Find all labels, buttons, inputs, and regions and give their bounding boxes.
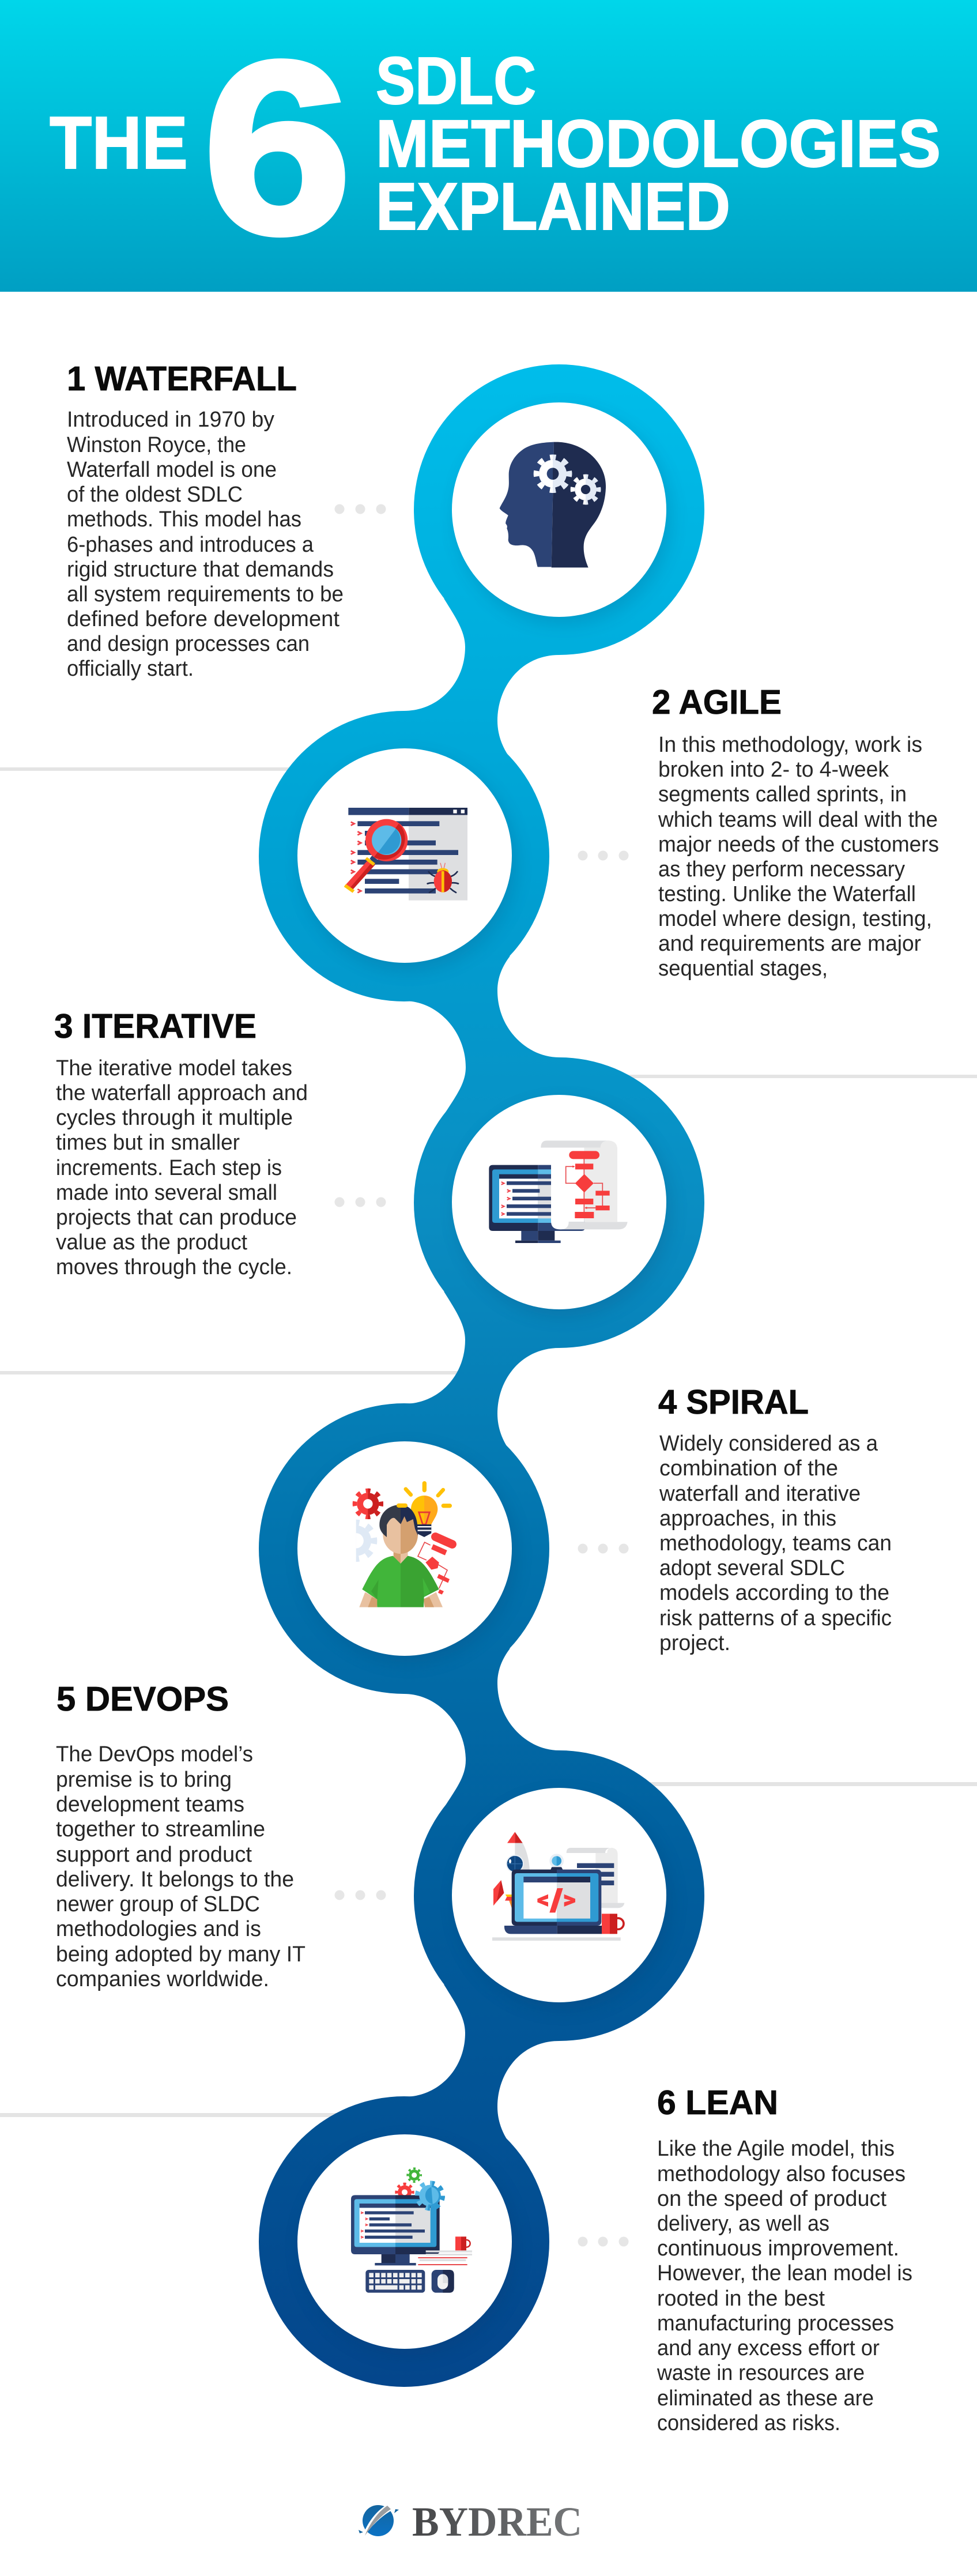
text block: iterative: cycles through it multiple (56, 1106, 293, 1130)
text block: waterfall: methods. This model has (67, 507, 301, 532)
heading: devops: 5 DEVOPS (56, 1680, 229, 1718)
text block: spiral: models according to the (659, 1581, 889, 1605)
icon: laptop with code, rocket and mug (492, 1832, 624, 1941)
title: SDLC (376, 43, 536, 118)
text block: agile: broken into 2- to 4-week (658, 758, 889, 782)
text block: waterfall: defined before development (67, 607, 340, 631)
text block: devops: methodologies and is (56, 1917, 261, 1941)
text block: waterfall (67, 408, 344, 681)
text block: lean: delivery, as well as (657, 2212, 829, 2236)
panel: iterative text (54, 1007, 308, 1279)
text block: waterfall: of the oldest SDLC (67, 483, 243, 507)
title: EXPLAINED (376, 169, 730, 244)
text block: devops (56, 1742, 305, 1991)
text block: devops: newer group of SLDC (56, 1892, 260, 1916)
text block: waterfall: rigid structure that demands (67, 558, 334, 582)
text block: spiral: adopt several SDLC (659, 1556, 845, 1580)
text block: iterative: increments. Each step is (56, 1156, 282, 1180)
text block: agile: testing. Unlike the Waterfall (658, 882, 916, 906)
text block: agile: sequential stages, (658, 956, 828, 981)
text block: agile (658, 733, 939, 981)
text block: iterative: projects that can produce (56, 1206, 297, 1230)
text block: agile: as they perform necessary (658, 857, 905, 882)
panel: agile text (652, 683, 939, 981)
text block: waterfall: Winston Royce, the (67, 433, 246, 457)
text block: spiral (659, 1432, 892, 1655)
text block: devops: development teams (56, 1792, 244, 1817)
panel: waterfall text (67, 360, 344, 681)
logo: Bydrec (359, 2499, 582, 2545)
heading: lean: 6 LEAN (657, 2084, 778, 2122)
text block: agile: model where design, testing, (658, 907, 932, 931)
text block: waterfall: 6-phases and introduces a (67, 533, 314, 557)
text block: spiral: risk patterns of a specific (659, 1606, 892, 1630)
text block: lean: waste in resources are (657, 2361, 865, 2385)
text block: iterative: moves through the cycle. (56, 1255, 292, 1279)
text block: devops: The DevOps model’s (56, 1742, 253, 1767)
connector dots: agile (578, 851, 628, 860)
heading: iterative: 3 ITERATIVE (54, 1007, 256, 1045)
text block: agile: which teams will deal with the (658, 808, 938, 832)
text block: devops: delivery. It belongs to the (56, 1867, 294, 1892)
logo wordmark: BYDREC (412, 2499, 582, 2545)
header banner (0, 0, 977, 292)
text block: lean: considered as risks. (657, 2411, 840, 2435)
text block: iterative: The iterative model takes (56, 1056, 292, 1080)
text block: agile: and requirements are major (658, 932, 921, 956)
text block: iterative: value as the product (56, 1230, 247, 1255)
text block: waterfall: all system requirements to be (67, 582, 344, 607)
text block: devops: companies worldwide. (56, 1967, 269, 1991)
text block: lean: on the speed of product (657, 2187, 887, 2211)
heading: spiral: 4 SPIRAL (658, 1383, 809, 1421)
text block: lean: manufacturing processes (657, 2311, 894, 2336)
icon: monitor with flowchart scroll (489, 1140, 628, 1243)
text block: spiral: project. (659, 1631, 730, 1655)
text block: waterfall: Waterfall model is one (67, 458, 277, 482)
text block: lean: Like the Agile model, this (657, 2137, 895, 2161)
text block: lean: methodology also focuses (657, 2162, 906, 2186)
panel: devops text (56, 1680, 305, 1991)
text block: devops: being adopted by many IT (56, 1942, 305, 1967)
icon: code window with magnifier and bug (344, 808, 467, 901)
text block: lean: rooted in the best (657, 2287, 825, 2311)
icon: head with gears (500, 442, 606, 567)
connector dots: devops (334, 1890, 386, 1900)
text block: iterative: times but in smaller (56, 1131, 240, 1155)
text block: devops: support and product (56, 1843, 252, 1867)
connector dots: spiral (578, 1544, 628, 1553)
text block: spiral: waterfall and iterative (659, 1482, 861, 1506)
text block: iterative (56, 1056, 308, 1279)
text block: lean: continuous improvement. (657, 2236, 899, 2261)
connector dots: iterative (334, 1197, 386, 1207)
panel: lean text (657, 2084, 912, 2435)
text block: waterfall: officially start. (67, 657, 194, 681)
text block: spiral: Widely considered as a (659, 1432, 878, 1456)
text block: lean (657, 2137, 912, 2435)
serpentine path with six rings (259, 364, 704, 2387)
text block: waterfall: and design processes can (67, 632, 310, 656)
connector dots: lean (578, 2237, 628, 2246)
title: METHODOLOGIES (376, 106, 941, 181)
text block: lean: However, the lean model is (657, 2261, 912, 2285)
text block: waterfall: Introduced in 1970 by (67, 408, 274, 432)
title: THE (50, 101, 188, 184)
text block: spiral: methodology, teams can (659, 1531, 892, 1556)
title: 6 (203, 11, 352, 285)
text block: spiral: approaches, in this (659, 1507, 836, 1531)
title (50, 11, 941, 285)
icon: logo globe (359, 2505, 399, 2538)
text block: iterative: made into several small (56, 1181, 277, 1205)
text block: spiral: combination of the (659, 1456, 838, 1481)
text block: lean: eliminated as these are (657, 2386, 874, 2411)
text block: iterative: the waterfall approach and (56, 1081, 308, 1105)
icon: desktop computer with gears and keyboard (351, 2168, 472, 2293)
panel: spiral text (658, 1383, 892, 1655)
text block: devops: premise is to bring (56, 1768, 232, 1792)
text block: devops: together to streamline (56, 1817, 265, 1841)
text block: lean: and any excess effort or (657, 2336, 880, 2360)
connector dots: waterfall (334, 504, 386, 514)
heading: waterfall: 1 WATERFALL (67, 360, 297, 398)
text block: agile: In this methodology, work is (658, 733, 922, 757)
text block: agile: segments called sprints, in (658, 782, 907, 807)
heading: agile: 2 AGILE (652, 683, 782, 721)
icon: developer with gear, bulb and flowchart (353, 1481, 457, 1607)
text block: agile: major needs of the customers (658, 833, 939, 857)
